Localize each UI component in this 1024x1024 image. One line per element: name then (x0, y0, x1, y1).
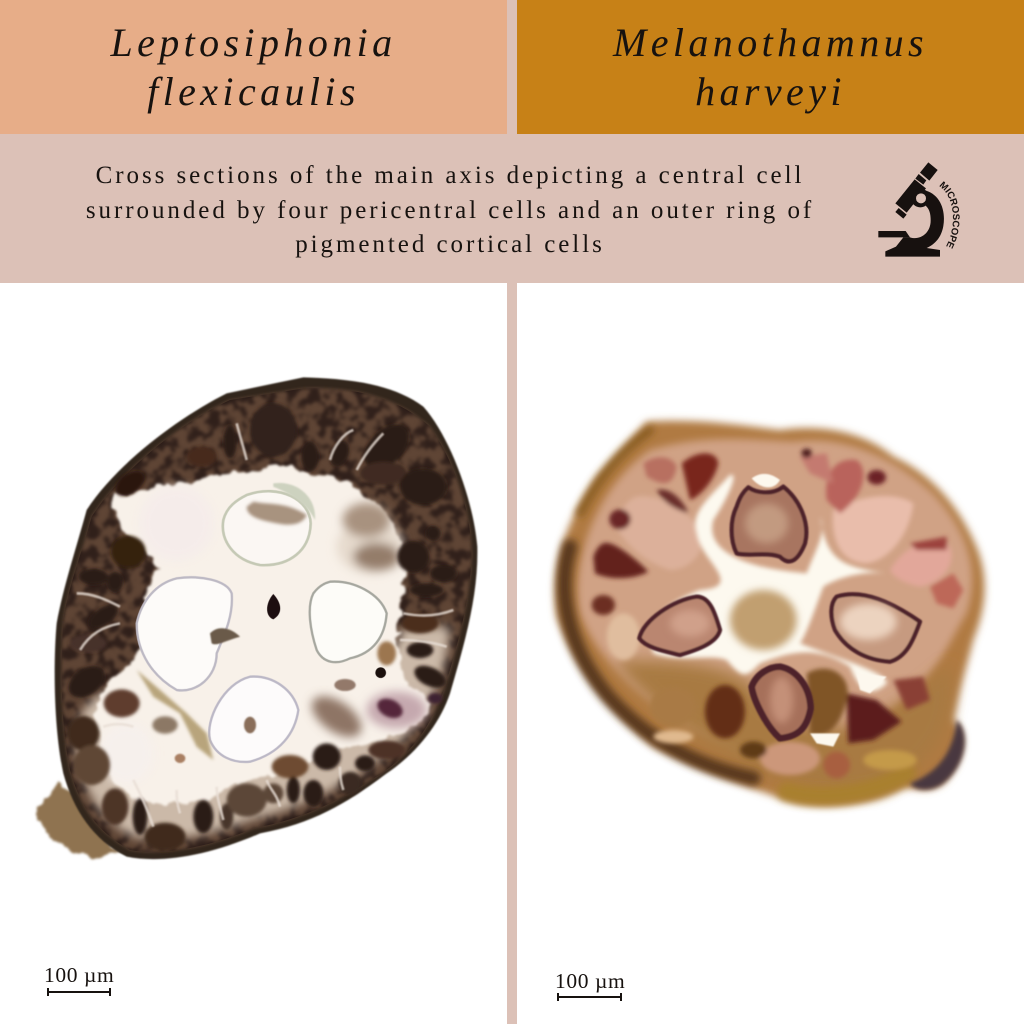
brown cortical tone (62, 388, 472, 852)
pale cell lobes reaching into the cortex (100, 487, 427, 783)
icon: microscope: MICROSCOPE (939, 181, 960, 249)
pericentral cells (639, 487, 920, 738)
text: description: Cross sections of the main axis depicting a central cell (96, 162, 804, 189)
heading: Melanothamnus harveyi: harveyi (695, 69, 846, 114)
centre divider (507, 0, 517, 1024)
text: description (86, 162, 814, 258)
outer ring (55, 377, 477, 859)
heading: Melanothamnus harveyi: Melanothamnus (613, 20, 928, 65)
text: description: surrounded by four pericentral cells and an outer ring of (86, 196, 814, 224)
pale interior (95, 469, 427, 805)
outer cell wall (555, 421, 985, 806)
central cell (730, 590, 797, 650)
heading: Melanothamnus harveyi (612, 20, 928, 114)
dark lower and left rim (564, 430, 907, 796)
heading: Leptosiphonia flexicaulis (110, 20, 397, 114)
pale lower cortex band (76, 627, 450, 839)
chart: Leptosiphonia cross section (34, 376, 478, 861)
text: description: pigmented cortical cells (295, 231, 605, 258)
lower tan tissue (613, 660, 952, 793)
panel: description band (0, 134, 1024, 283)
heading: Leptosiphonia flexicaulis: Leptosiphonia (110, 20, 397, 65)
inner pink tissue (578, 439, 972, 761)
pale strands between cortical cells (77, 423, 453, 827)
central cell and pericentral cells (137, 483, 406, 763)
heading: Leptosiphonia flexicaulis: flexicaulis (147, 69, 360, 114)
panel: left species header (0, 0, 507, 134)
scale bar: left: 100 µm (44, 963, 114, 987)
debris at lower left (37, 783, 117, 857)
mottled texture on cortex (62, 388, 472, 852)
dark cortical cells (63, 403, 457, 851)
icon: microscope (878, 162, 960, 257)
white central matrix (651, 475, 887, 691)
pericentral cell highlights (670, 503, 897, 723)
pink and maroon cortical cells (592, 449, 963, 778)
dark outgrowth (910, 720, 965, 790)
white gaps (752, 474, 887, 747)
scale bar: right: 100 µm (555, 969, 625, 993)
panel: right species header (517, 0, 1024, 134)
chart: Melanothamnus cross section (548, 414, 992, 814)
